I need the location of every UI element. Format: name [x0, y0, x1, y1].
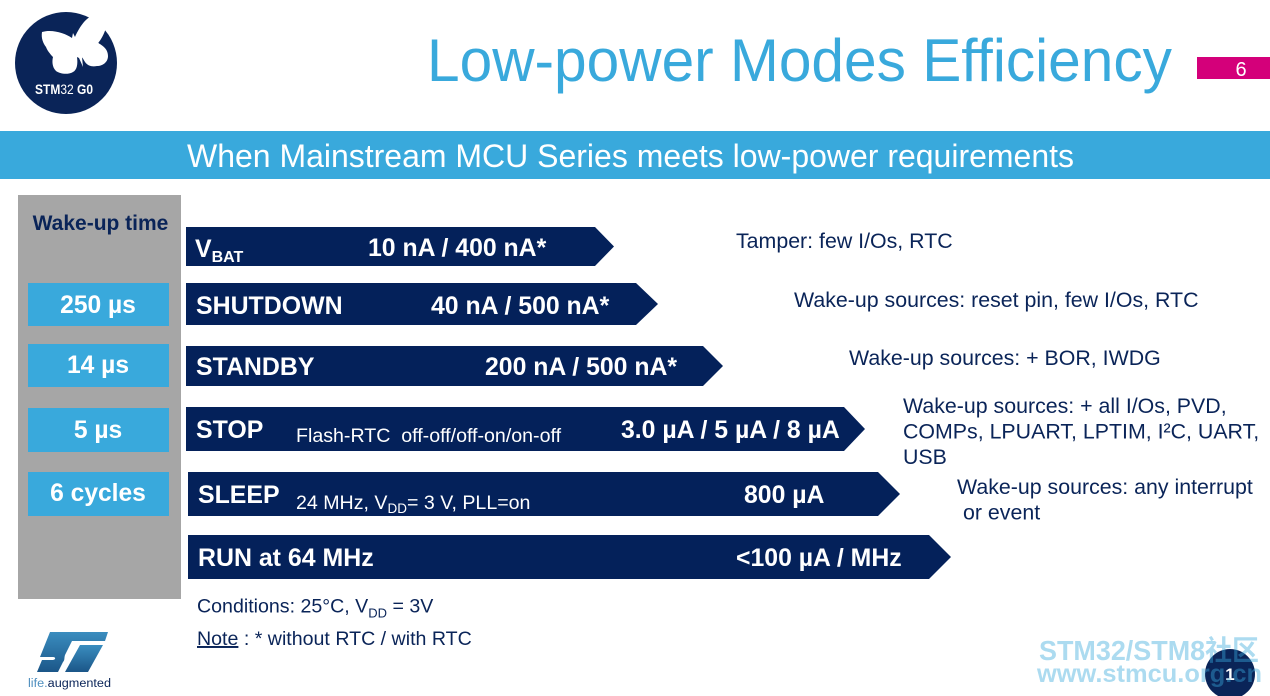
arrow: RUN: RUN at 64 MHz: [198, 544, 374, 572]
note: STOP wake-up: USB: [903, 445, 947, 469]
note: SHUTDOWN wake-up: Wake-up sources: reset pin, few I/Os, RTC: [794, 288, 1198, 312]
note: SLEEP wake-up: Wake-up sources: any interrupt: [957, 475, 1253, 499]
panel: wake-up time: [18, 195, 181, 599]
subtitle banner: [0, 131, 1270, 179]
wake-up value: 5 µs: [28, 408, 169, 452]
arrow: STANDBY: [186, 346, 723, 386]
arrow: SLEEP: = 3 V, PLL=on: [407, 492, 530, 514]
watermark: www.stmcu.org.cn: [1036, 660, 1262, 688]
conditions: = 3V: [387, 596, 433, 618]
conditions: DD: [368, 606, 387, 620]
note: STOP wake-up: COMPs, LPUART, LPTIM, I²C, UART,: [903, 420, 1259, 444]
wake-up value: 14 µs: 14 µs: [67, 352, 129, 379]
page number tag: [1197, 57, 1270, 81]
arrow: STANDBY: 200 nA / 500 nA*: [485, 354, 677, 381]
wake-up value: 14 µs: [28, 344, 169, 387]
arrow: STOP: 3.0 µA / 5 µA / 8 µA: [621, 417, 840, 444]
arrow: SLEEP: 800 µA: [744, 482, 825, 509]
page badge: [1205, 649, 1255, 696]
arrow: RUN: [188, 535, 951, 579]
arrow: VBAT: [186, 227, 614, 266]
note: SLEEP wake-up: or event: [963, 500, 1040, 524]
conditions: Conditions: 25°C, V: [197, 596, 368, 618]
footnote: Note : * without RTC / with RTC: [197, 628, 472, 650]
arrow: SLEEP: [188, 472, 900, 516]
logo: ST life.augmented: life.augmented: [28, 678, 111, 690]
note: STANDBY wake-up: Wake-up sources: + BOR, IWDG: [849, 346, 1161, 370]
arrow: VBAT: BAT: [212, 249, 244, 266]
arrow: STANDBY: STANDBY: [196, 353, 315, 381]
arrow: SHUTDOWN: SHUTDOWN: [196, 292, 343, 320]
note: STOP wake-up: Wake-up sources: + all I/Os, PVD,: [903, 394, 1227, 418]
arrow: VBAT: 10 nA / 400 nA*: [368, 235, 547, 262]
arrow: STOP: Flash-RTC off-off/off-on/on-off: [296, 425, 562, 447]
note: VBAT wake-up: Tamper: few I/Os, RTC: [736, 229, 953, 253]
arrow: SHUTDOWN: [186, 283, 658, 325]
wake-up value: 6 cycles: 6 cycles: [50, 480, 146, 507]
watermark: STM32/STM8社区: [1039, 635, 1259, 666]
page badge: 1: [1225, 665, 1235, 684]
wake-up value: 250 µs: [28, 283, 169, 326]
arrow: SLEEP: 24 MHz, V: [296, 492, 387, 514]
arrow: SLEEP: SLEEP: [198, 481, 280, 509]
wake-up heading: Wake-up time: [33, 212, 168, 235]
arrow: RUN: <100 µA / MHz: [736, 545, 902, 572]
logo: STM32 G0 butterfly badge: STM32 G0: [35, 82, 93, 97]
arrow: VBAT: V: [195, 235, 212, 263]
arrow: STOP: STOP: [196, 416, 263, 444]
arrow: SHUTDOWN: 40 nA / 500 nA*: [431, 293, 610, 320]
title: Low-power Modes Efficiency: [427, 26, 1173, 94]
arrow: STOP: [186, 407, 865, 451]
arrow: SLEEP: DD: [387, 501, 407, 516]
subtitle banner: When Mainstream MCU Series meets low-power requirements: [187, 138, 1074, 174]
logo: ST life.augmented: [28, 632, 111, 690]
wake-up value: 250 µs: 250 µs: [60, 292, 136, 319]
watermark: [1036, 635, 1262, 688]
wake-up value: 6 cycles: [28, 472, 169, 516]
logo: STM32 G0 butterfly badge: [15, 12, 117, 114]
page number tag: 6: [1235, 59, 1247, 81]
wake-up value: 5 µs: 5 µs: [74, 417, 122, 444]
